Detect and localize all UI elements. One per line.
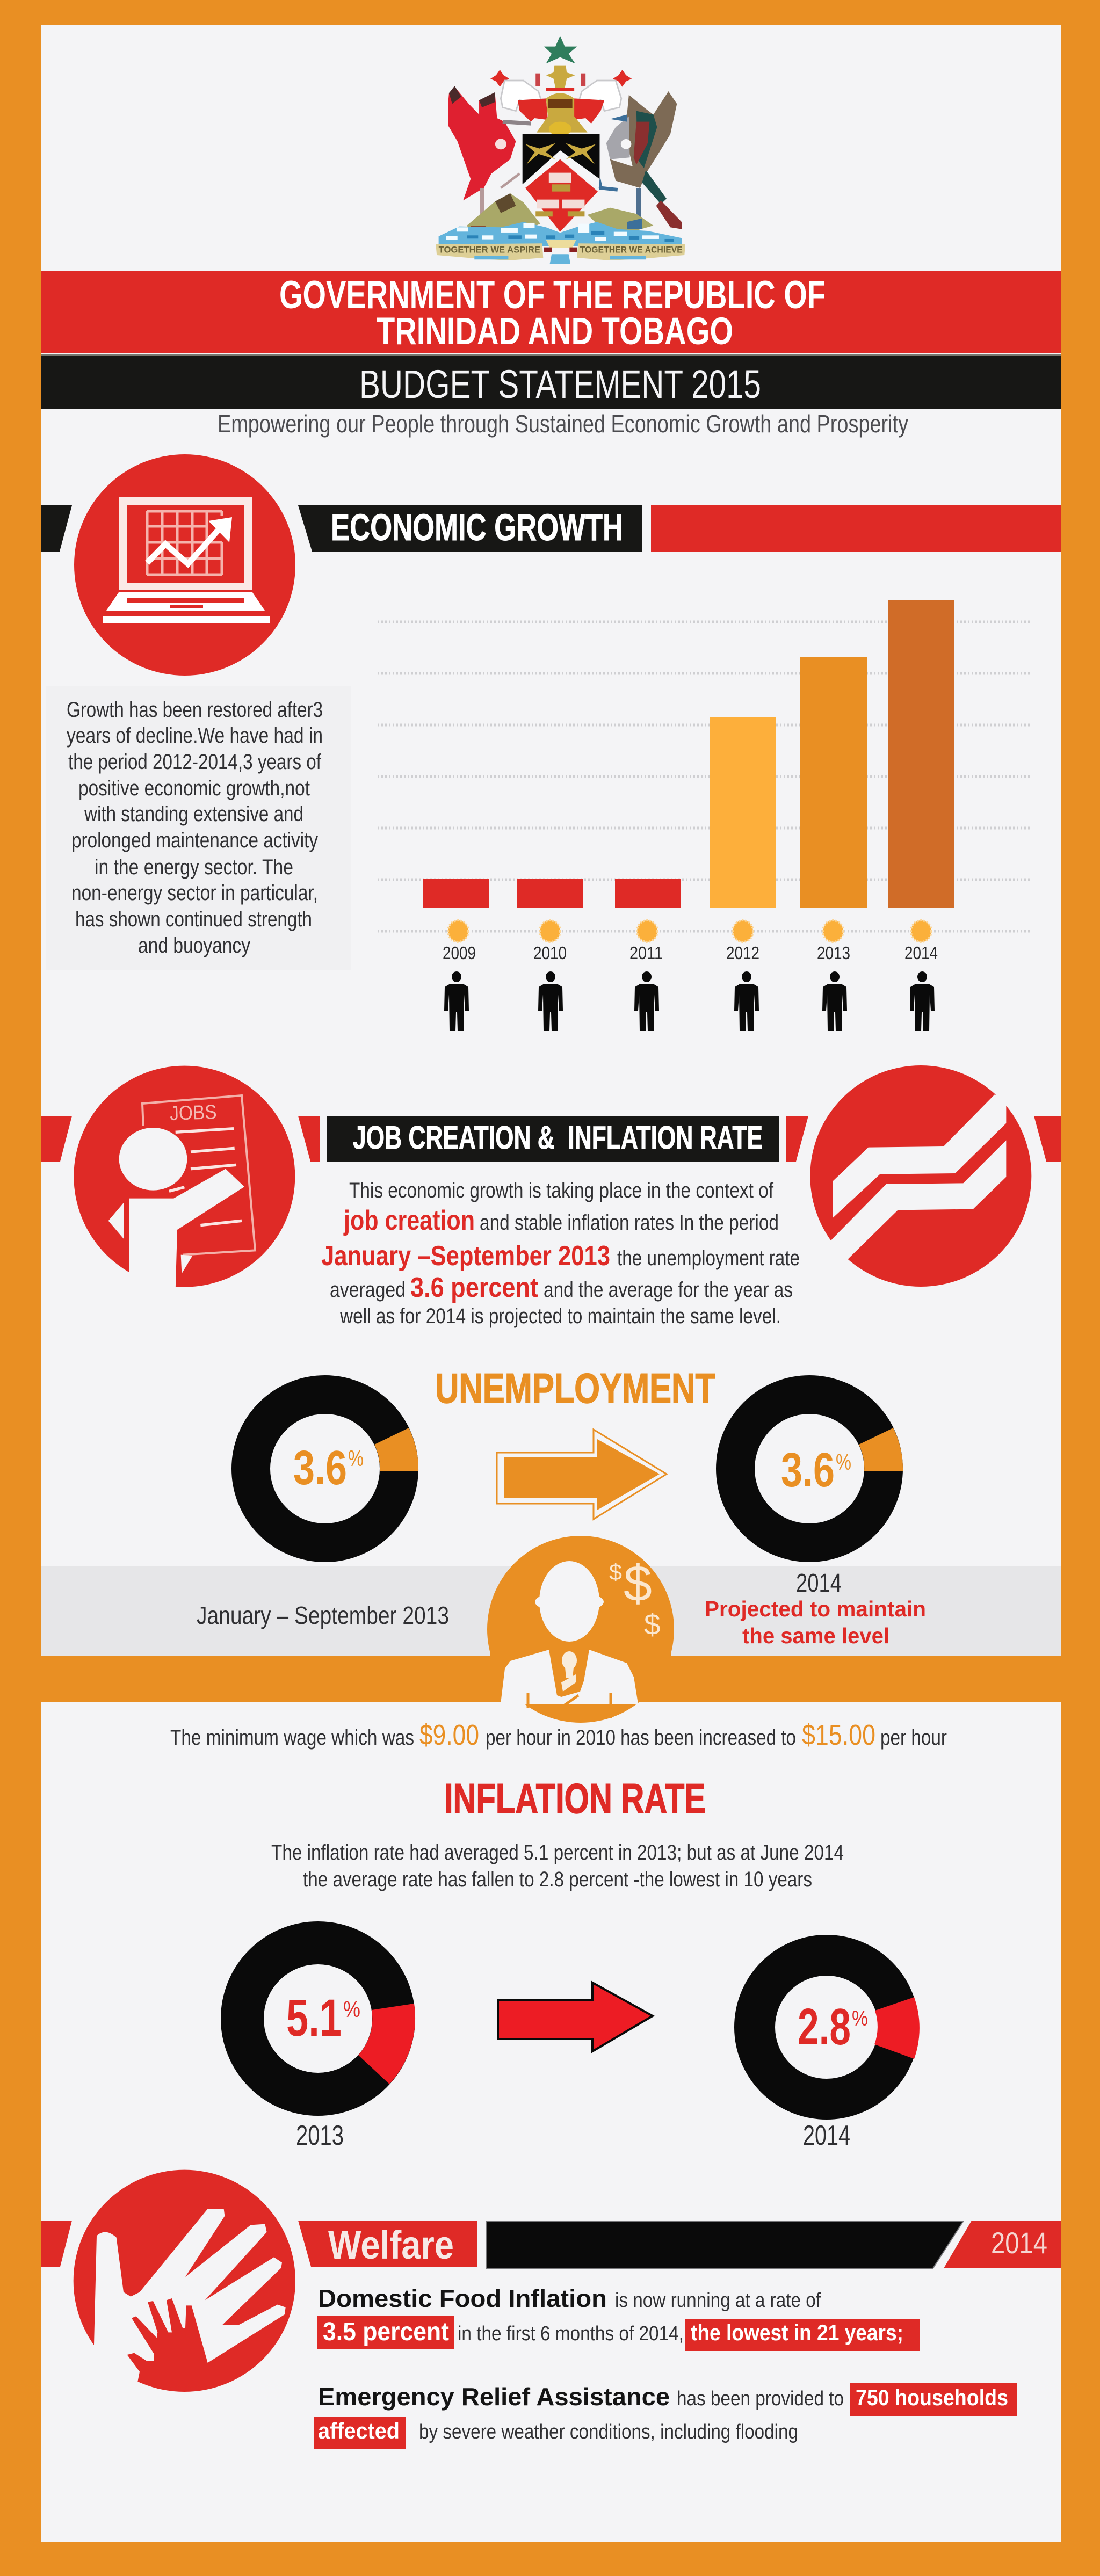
value: 3.6 percent: 3.6 (781, 1443, 835, 1497)
text block: job creation paragraph: the unemployment rate (617, 1246, 800, 1270)
icon: laptop with rising chart (74, 454, 295, 676)
highlight: 3.6 percent: 3.6 percent (410, 1272, 538, 1303)
icon: zigzag inflation trend (810, 1065, 1031, 1287)
icon: helping hands (74, 2170, 295, 2392)
arms: red bird (448, 87, 516, 200)
bar 2013 (800, 657, 867, 908)
arms: helmet (537, 93, 588, 133)
caption: 2014: 2014 (796, 1569, 842, 1598)
title line 2: TRINIDAD AND TOBAGO (377, 310, 733, 353)
badge: affected: affected (318, 2418, 400, 2443)
arms: sea (439, 222, 682, 246)
year labels: 2011 (629, 943, 663, 963)
text block: growth summary: non-energy sector in particular, (71, 881, 318, 905)
timeline dots (448, 920, 931, 942)
text block: welfare food inflation (317, 2284, 920, 2351)
text block: job creation paragraph: This economic growth is taking place in the context of (349, 1179, 774, 1202)
dollar signs: $ (624, 1555, 652, 1612)
year labels: 2013 (817, 943, 850, 963)
text: minimum wage: per hour in 2010 has been increased to (486, 1726, 796, 1750)
label: emergency relief assistance: Emergency Relief Assistance (318, 2383, 670, 2411)
text: minimum wage (170, 1719, 947, 1751)
heading: job creation and inflation rate: JOB CREATION & INFLATION RATE (353, 1120, 763, 1156)
heading bar (327, 1116, 779, 1162)
jobs label: JOBS (169, 1100, 217, 1124)
badge: 3.5 percent: 3.5 percent (323, 2318, 449, 2346)
text block: emergency relief: has been provided to (677, 2388, 844, 2410)
text block: growth summary: has shown continued strength (75, 908, 312, 931)
text block: job creation paragraph: and the average for the year as (544, 1278, 793, 1302)
bar 2012 (710, 717, 776, 908)
icon: coat of arms (436, 36, 685, 264)
arms: star crest (544, 36, 577, 63)
arms: motto text: TOGETHER WE ASPIRE (439, 245, 540, 255)
dollar signs: $ (644, 1608, 661, 1641)
value: 3.6 percent: 3.6 (293, 1441, 347, 1495)
label: 2014: 2014 (991, 2226, 1047, 2260)
budget statement heading: BUDGET STATEMENT 2015 (359, 362, 761, 407)
year labels: 2014 (904, 943, 938, 963)
text block: job creation paragraph: and stable inflation rates In the period (480, 1211, 779, 1235)
text block: job creation paragraph (321, 1179, 800, 1328)
arms: landscape (467, 193, 540, 235)
donut chart: inflation 2013 (242, 1943, 415, 2151)
text block: emergency relief: by severe weather conditions, including flooding (419, 2421, 798, 2443)
figure: $9.00: $9.00 (419, 1719, 479, 1751)
grey caption strip: the same level (742, 1623, 889, 1648)
bar 2014 (888, 600, 954, 908)
label: 2014: 2014 (803, 2120, 850, 2151)
icon: businessman with dollars (487, 1536, 674, 1723)
welfare tab (298, 2221, 477, 2267)
dollar signs: $ (609, 1559, 622, 1585)
note: projected to maintain: Projected to maintain (705, 1597, 926, 1621)
text: minimum wage: per hour (880, 1726, 947, 1750)
highlight: january to september 2013: January –September 2013 (321, 1240, 610, 1272)
header band: job creation and inflation (41, 1116, 1061, 1162)
value: 2.8 percent: 2.8 (798, 1998, 851, 2056)
header band: welfare (41, 2221, 1061, 2268)
red title band (41, 271, 1061, 353)
donut chart: unemployment 2013: % (348, 1446, 364, 1471)
lower white panel (41, 1702, 1061, 2542)
donut chart: inflation 2014 (755, 1955, 920, 2151)
text block: job creation paragraph: averaged (330, 1278, 406, 1302)
text block: growth summary: Growth has been restored after3 (67, 698, 323, 722)
arrow: unemployment unchanged (497, 1430, 667, 1519)
donut chart: unemployment 2013 (251, 1395, 418, 1543)
text block: growth summary: positive economic growth,not (78, 777, 310, 800)
arms: motto text right: TOGETHER WE ACHIEVE (580, 245, 683, 255)
bar chart: growth by year (378, 600, 1032, 1031)
year labels: 2012 (726, 943, 759, 963)
person pictograms (444, 971, 935, 1031)
dollar signs (609, 1555, 661, 1641)
text block: growth summary: with standing extensive and (84, 802, 303, 826)
grey caption strip (41, 1566, 1061, 1656)
text block: growth summary: years of decline.We have had in (67, 724, 323, 748)
label: 2013: 2013 (296, 2120, 344, 2151)
year tab (944, 2221, 1061, 2268)
arrow: inflation falling (498, 1983, 653, 2051)
text block: emergency relief (314, 2383, 1017, 2449)
bar 2010 (517, 879, 583, 908)
heading: inflation rate: INFLATION RATE (444, 1775, 706, 1822)
tagline: Empowering our People through Sustained Economic Growth and Prosperity (218, 410, 908, 438)
text block: growth summary: prolonged maintenance activity (71, 829, 318, 852)
donut chart: unemployment 2014: % (836, 1449, 851, 1475)
heading bar (298, 505, 642, 552)
text: minimum wage: The minimum wage which was (170, 1726, 414, 1750)
highlight: job creation: job creation (343, 1205, 475, 1236)
heading: economic growth: ECONOMIC GROWTH (331, 506, 623, 548)
bar 2011 (615, 879, 681, 908)
black bar (487, 2222, 963, 2268)
text block: welfare food inflation: is now running at a rate of (615, 2289, 821, 2312)
text block: growth summary: the period 2012-2014,3 years of (68, 750, 322, 774)
heading: welfare: Welfare (328, 2223, 454, 2267)
label: domestic food inflation: Domestic Food Inflation (318, 2284, 607, 2312)
badge: 750 households: 750 households (856, 2385, 1008, 2410)
text block: growth summary (46, 686, 351, 970)
arms: shield (523, 134, 599, 184)
text block: job creation paragraph: well as for 2014 is projected to maintain the same level. (339, 1304, 781, 1328)
year labels (443, 943, 938, 963)
donut chart: inflation 2014: % (852, 2007, 868, 2030)
badge: lowest in 21 years: the lowest in 21 years; (691, 2320, 903, 2345)
arms: motto scroll (436, 243, 685, 264)
text block: growth summary: in the energy sector. The (95, 855, 293, 879)
text block: inflation summary: The inflation rate had averaged 5.1 percent in 2013; but as at June 2014 (271, 1841, 844, 1864)
donut chart: inflation 2013: % (343, 1997, 360, 2022)
title line 1: GOVERNMENT OF THE REPUBLIC OF (279, 273, 826, 317)
text block: welfare food inflation: in the first 6 months of 2014, (458, 2323, 684, 2345)
header band: economic growth (41, 505, 1061, 552)
year labels: 2009 (443, 943, 476, 963)
heading: unemployment: UNEMPLOYMENT (435, 1365, 715, 1412)
arms: grey bird (610, 91, 677, 188)
black subtitle band (41, 354, 1061, 409)
figure: $15.00: $15.00 (802, 1719, 875, 1751)
value: 5.1 percent: 5.1 (286, 1989, 342, 2047)
text block: inflation summary (271, 1841, 844, 1891)
text block: inflation summary: the average rate has fallen to 2.8 percent -the lowest in 10 years (303, 1868, 812, 1891)
upper white panel (41, 25, 1061, 1656)
icon: person holding jobs sheet (74, 1066, 295, 1290)
bar 2009 (423, 879, 489, 908)
text block: growth summary: and buoyancy (138, 934, 250, 957)
caption: january to september 2013: January – September 2013 (197, 1601, 449, 1629)
donut chart: unemployment 2014 (735, 1395, 903, 1543)
year labels: 2010 (533, 943, 567, 963)
